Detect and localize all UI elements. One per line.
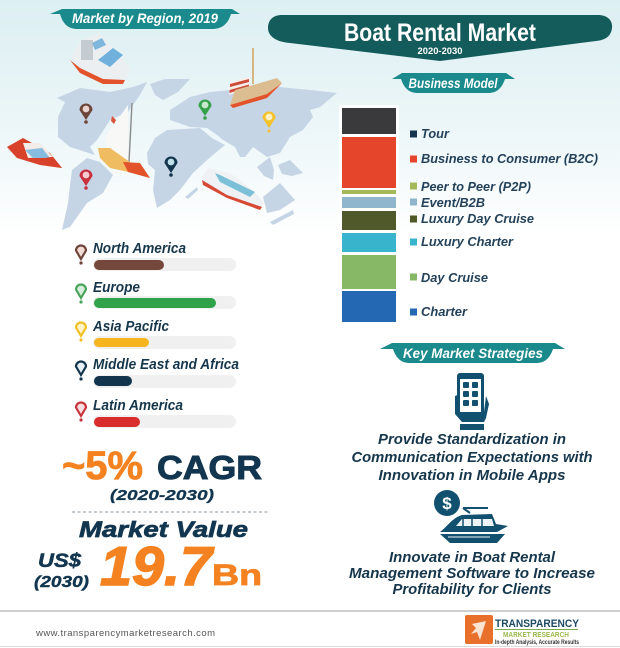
world map: [57, 79, 337, 230]
ribbon heading: Market by Region: Market by Region, 2019: [72, 10, 218, 26]
ribbon heading: Key Market Strategies: Key Market Strategies: [403, 345, 543, 361]
region bars: Middle East and Africa: [93, 357, 239, 373]
chart legend: Luxury Charter: [421, 234, 514, 249]
chart legend: Tour: [421, 126, 450, 141]
strategy text 1: Communication Expectations with: [352, 449, 592, 466]
market value callout: (2030): [34, 574, 89, 591]
chart legend: Day Cruise: [421, 270, 488, 285]
CAGR callout: [62, 444, 262, 504]
market value callout: Bn: [212, 559, 262, 592]
chart legend: Business to Consumer (B2C): [421, 151, 598, 166]
strategy text 1: Innovation in Mobile Apps: [378, 467, 566, 484]
region bars: Latin America: [93, 398, 183, 414]
chart legend: Charter: [421, 304, 468, 319]
market value callout: 19.7: [100, 535, 215, 597]
region bars: Asia Pacific: [92, 319, 169, 335]
market value callout: US$: [38, 551, 81, 572]
logo: Transparency Market Research: [465, 615, 580, 646]
boat: sailboat centre: [98, 103, 150, 178]
strategy text 2: [349, 549, 595, 598]
chart legend: Luxury Day Cruise: [421, 211, 534, 226]
boat: sailing yacht top right: [229, 48, 282, 108]
ribbon heading: Key Market Strategies: [380, 343, 565, 363]
strategy text 2: Profitability for Clients: [392, 581, 552, 598]
footer: www.transparencymarketresearch.com: [35, 628, 215, 639]
strategy text 2: Innovate in Boat Rental: [389, 549, 556, 566]
stacked bar chart: business model: [339, 105, 399, 326]
ribbon heading: Business Model: [392, 73, 515, 93]
region bars: North America: [93, 241, 186, 257]
boat: speedboat left: [7, 138, 62, 168]
chart legend: Peer to Peer (P2P): [421, 179, 531, 194]
logo: Transparency Market Research: In-depth Analysis, Accurate Results: [495, 640, 580, 646]
region bars: [76, 241, 239, 428]
strategy text 2: Management Software to Increase: [349, 565, 595, 582]
market value callout: Market Value: [79, 517, 248, 542]
icon: dollar coin and yacht: [434, 490, 508, 543]
title banner: [268, 15, 612, 61]
ribbon heading: Market by Region: [50, 9, 240, 29]
chart legend: [410, 126, 598, 319]
ribbon heading: Business Model: Business Model: [408, 75, 498, 91]
boat: cruise ship top left: [70, 33, 130, 84]
chart legend: Event/B2B: [421, 195, 485, 210]
strategy text 1: Provide Standardization in: [378, 431, 566, 448]
CAGR callout: CAGR: [157, 449, 262, 486]
CAGR callout: (2020-2030): [110, 487, 214, 504]
boat: cruise liner right: [202, 168, 264, 210]
logo: Transparency Market Research: TRANSPARENCY: [495, 618, 580, 630]
market value callout: [34, 512, 270, 597]
title banner: 2020-2030: [418, 46, 462, 56]
title banner: Boat Rental Market: [344, 19, 537, 47]
icon: dollar coin and yacht: $: [442, 494, 452, 513]
region bars: Europe: [93, 280, 140, 296]
strategy text 1: [352, 431, 592, 484]
CAGR callout: ~5%: [62, 444, 143, 488]
icon: hand holding phone: [455, 373, 489, 430]
map pins: [80, 100, 276, 190]
logo: Transparency Market Research: MARKET RESEARCH: [503, 632, 569, 639]
